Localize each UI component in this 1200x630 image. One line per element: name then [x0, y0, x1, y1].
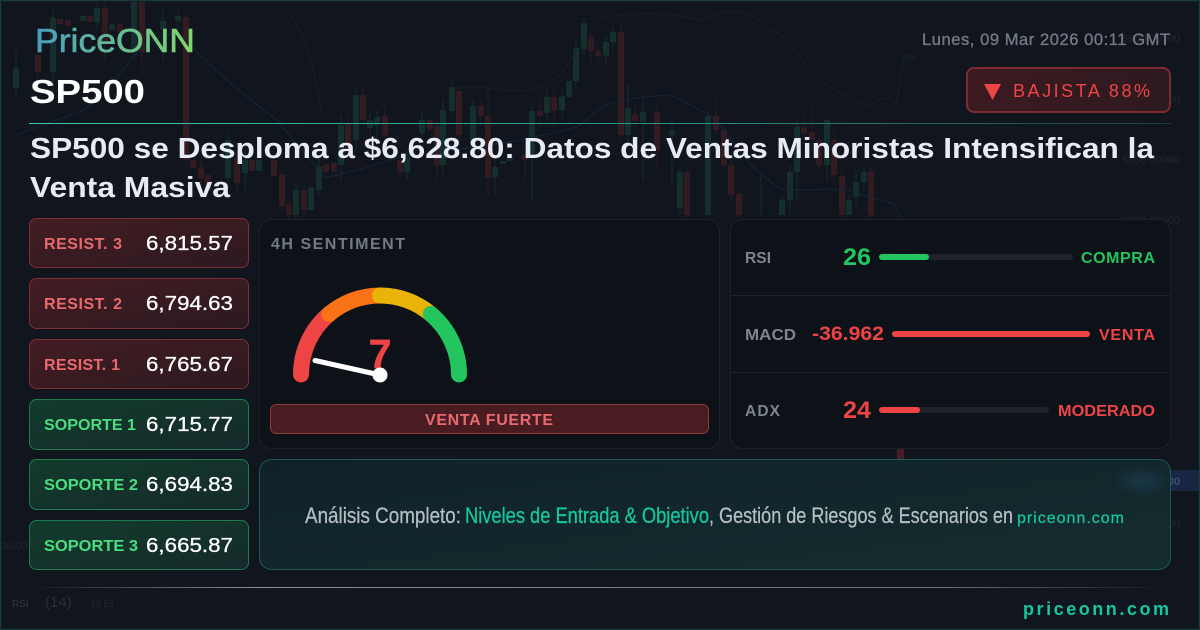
panel: call to action: [260, 460, 1172, 570]
logo: PriceONN: PriceONN: [35, 22, 195, 59]
indicator: RSI: [745, 244, 1155, 271]
call to action text: Niveles de Entrada & Objetivo: [465, 503, 709, 528]
indicator: MACD: -36.962: [812, 324, 884, 345]
level: support 2: SOPORTE 2: [44, 477, 138, 494]
sentiment heading: 4H SENTIMENT: [271, 236, 405, 253]
call to action text: priceonn.com: [1017, 510, 1124, 527]
level: support 2: 6,694.83: [146, 474, 233, 496]
background candlestick chart: 6628.80000: [1122, 476, 1180, 488]
level: resistance 1: 6,765.67: [146, 354, 233, 376]
call to action text: [305, 503, 1124, 528]
indicator: MACD: [745, 324, 1155, 345]
level: support 2: [30, 460, 248, 510]
level: resistance 3: RESIST. 3: [44, 236, 122, 253]
headline: Venta Masiva: [30, 172, 231, 204]
gauge value: 7: [369, 331, 391, 377]
call to action text: Análisis Completo:: [305, 503, 461, 528]
background candlestick chart: 00:00: [0, 540, 28, 552]
indicator: RSI: RSI: [745, 250, 771, 267]
indicator: MACD: VENTA: [1099, 327, 1155, 344]
indicator: ADX: 24: [843, 397, 872, 424]
level: resistance 2: [30, 278, 248, 328]
background candlestick chart: 6870.00000: [1122, 94, 1180, 106]
level: resistance 2: RESIST. 2: [44, 296, 122, 313]
indicator: ADX: [745, 397, 1155, 424]
level: resistance 3: 6,815.57: [146, 233, 233, 255]
bearish badge: [967, 68, 1170, 112]
level: support 3: 6,665.87: [146, 535, 233, 557]
sentiment verdict pill: [270, 404, 708, 434]
level: support 1: 6,715.77: [146, 414, 233, 436]
sentiment verdict pill: VENTA FUERTE: [425, 412, 553, 429]
level: support 1: [30, 400, 248, 450]
level: resistance 1: RESIST. 1: [44, 357, 120, 374]
indicator: RSI: 26: [843, 244, 871, 271]
headline: SP500 se Desploma a $6,628.80: Datos de Ventas Minoristas Intensifican la: [30, 133, 1155, 165]
background candlestick chart: RSI: [12, 599, 29, 610]
header divider: [29, 123, 1171, 124]
ticker heading: SP500: [30, 73, 145, 110]
level: resistance 1: [30, 340, 248, 388]
footer url: priceonn.com: [1023, 599, 1169, 619]
background candlestick chart: 6850.00000: [1122, 154, 1180, 166]
panel: technical indicators: [730, 220, 1170, 448]
background candlestick chart: 18 53: [91, 599, 114, 609]
background candlestick chart: 6800.00000: [1122, 215, 1180, 227]
icon: down triangle: [984, 84, 1001, 100]
panel: 4H sentiment gauge: [260, 220, 720, 448]
level: support 1: SOPORTE 1: [44, 417, 136, 434]
headline: [30, 133, 1155, 204]
indicator: MACD: MACD: [745, 327, 796, 344]
gauge arc: [301, 296, 459, 374]
gauge needle: [315, 360, 388, 382]
indicator: ADX: MODERADO: [1058, 403, 1155, 420]
indicator: RSI: COMPRA: [1081, 250, 1155, 267]
date: Lunes, 09 Mar 2026 00:11 GMT: [922, 31, 1170, 49]
level: resistance 3: [30, 218, 248, 268]
indicator: ADX: ADX: [745, 403, 781, 420]
call to action text: , Gestión de Riesgos & Escenarios en: [709, 503, 1013, 528]
background candlestick chart: 88: [906, 53, 915, 62]
level: support 3: SOPORTE 3: [44, 538, 138, 555]
background candlestick chart: 6900.00000: [1122, 33, 1180, 45]
level: support 3: [30, 520, 248, 570]
background candlestick chart: (14): [45, 594, 72, 611]
background candlestick chart: 6600.00000: [1122, 518, 1180, 530]
badge text: BAJISTA 88%: [1013, 81, 1150, 101]
footer divider: [29, 587, 1171, 588]
panel: resistance and support levels: [30, 218, 248, 570]
level: resistance 2: 6,794.63: [146, 293, 233, 315]
